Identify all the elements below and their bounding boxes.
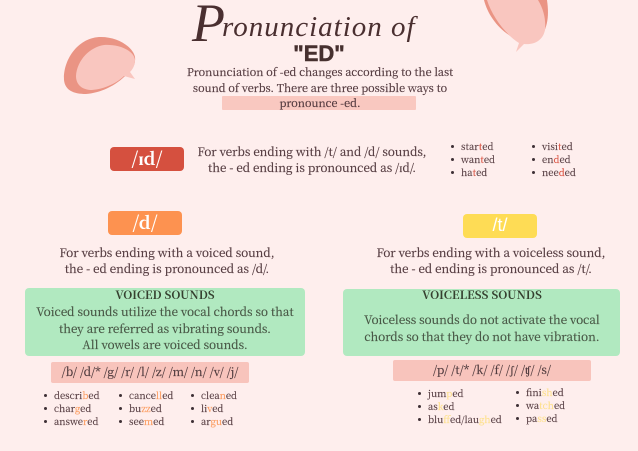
intro text: sound of verbs. There are three possible ways to bbox=[193, 80, 447, 96]
description: t: For verbs ending with a voiceless sound, bbox=[377, 245, 605, 261]
word list: voiceless column 1: bluffed/laughed bbox=[428, 412, 502, 426]
tag: t: /t/ bbox=[492, 215, 508, 235]
heading: voiceless: VOICELESS SOUNDS bbox=[422, 287, 542, 303]
text: voiceless: Voiceless sounds do not activate the vocal bbox=[364, 312, 600, 328]
tag: id: /ɪd/ bbox=[131, 145, 163, 171]
word list: voiced column 2: seemed bbox=[129, 414, 164, 428]
word list: voiced column 2: cancelled bbox=[129, 388, 173, 402]
word list: voiced column 3 bbox=[191, 388, 237, 428]
word list: id column 2: visited bbox=[542, 139, 573, 153]
intro text: Pronunciation of -ed changes according to the last bbox=[187, 64, 453, 80]
text: voiced: they are referred as vibrating sounds. bbox=[59, 320, 271, 336]
tag: d bbox=[108, 211, 182, 235]
tag: t bbox=[463, 214, 537, 238]
description: d bbox=[59, 245, 275, 277]
intro text bbox=[187, 64, 453, 111]
text: voiced: Voiced sounds utilize the vocal chords so that bbox=[36, 304, 294, 320]
intro text: pronounce -ed. bbox=[279, 95, 361, 111]
intro highlight bbox=[222, 96, 416, 110]
phoneme bar: voiceless bbox=[393, 360, 591, 381]
description: d: For verbs ending with a voiced sound, bbox=[59, 245, 275, 261]
text: voiced bbox=[36, 304, 294, 353]
word list: voiced column 1 bbox=[44, 388, 100, 428]
word list: id column 1 bbox=[451, 139, 495, 179]
icon: left speech bubble bbox=[64, 37, 136, 94]
word list: voiced column 3: lived bbox=[201, 401, 223, 415]
word list: voiceless column 1 bbox=[418, 386, 502, 426]
word list: voiceless column 2 bbox=[516, 385, 565, 425]
phoneme bar: voiced bbox=[51, 362, 249, 383]
word list: voiceless column 2: watched bbox=[526, 398, 565, 412]
description: id: For verbs ending with /t/ and /d/ sounds, bbox=[198, 144, 426, 160]
panel: voiceless sounds bbox=[343, 289, 620, 356]
word list: voiced column 3: cleaned bbox=[201, 388, 237, 402]
word list: voiced column 1: charged bbox=[54, 401, 91, 415]
text: voiceless: chords so that they do not have vibration. bbox=[364, 328, 600, 344]
word list: id column 1: wanted bbox=[461, 152, 495, 166]
word list: voiced column 2: buzzed bbox=[129, 401, 162, 415]
word list: voiced column 1: described bbox=[54, 388, 100, 402]
description: id bbox=[198, 144, 426, 176]
tag: d: /d/ bbox=[132, 209, 158, 235]
word list: voiceless column 1: asked bbox=[428, 399, 454, 413]
phoneme bar: voiceless: /p/ /t/* /k/ /f/ /ʃ/ /ʧ/ /s/ bbox=[433, 362, 551, 378]
word list: voiceless column 2: finished bbox=[526, 385, 564, 399]
description: id: the - ed ending is pronounced as /ɪd/. bbox=[208, 160, 416, 176]
description: d: the - ed ending is pronounced as /d/. bbox=[65, 261, 269, 277]
word list: voiced column 2 bbox=[119, 388, 174, 428]
description: t bbox=[377, 245, 605, 277]
word list: id column 1: started bbox=[461, 139, 493, 153]
word list: id column 1: hated bbox=[461, 165, 487, 179]
tag: id bbox=[110, 147, 184, 171]
word list: voiceless column 2: passed bbox=[526, 411, 558, 425]
phoneme bar: voiced: /b/ /d/* /g/ /r/ /l/ /z/ /m/ /n/ /v/ /j/ bbox=[62, 364, 238, 380]
word list: voiced column 3: argued bbox=[201, 414, 233, 428]
word list: voiced column 1: answered bbox=[54, 414, 98, 428]
word list: id column 2 bbox=[532, 139, 576, 179]
text: voiced: All vowels are voiced sounds. bbox=[82, 337, 248, 353]
text: voiceless bbox=[364, 312, 600, 344]
description: t: the - ed ending is pronounced as /t/. bbox=[390, 261, 592, 277]
word list: id column 2: needed bbox=[542, 165, 576, 179]
word list: id column 2: ended bbox=[542, 152, 571, 166]
heading: voiced: VOICED SOUNDS bbox=[115, 287, 215, 303]
panel: voiced sounds bbox=[25, 288, 305, 356]
icon: right speech bubble bbox=[484, 0, 548, 52]
subtitle: ED: "ED" bbox=[293, 41, 345, 66]
word list: voiceless column 1: jumped bbox=[428, 386, 464, 400]
